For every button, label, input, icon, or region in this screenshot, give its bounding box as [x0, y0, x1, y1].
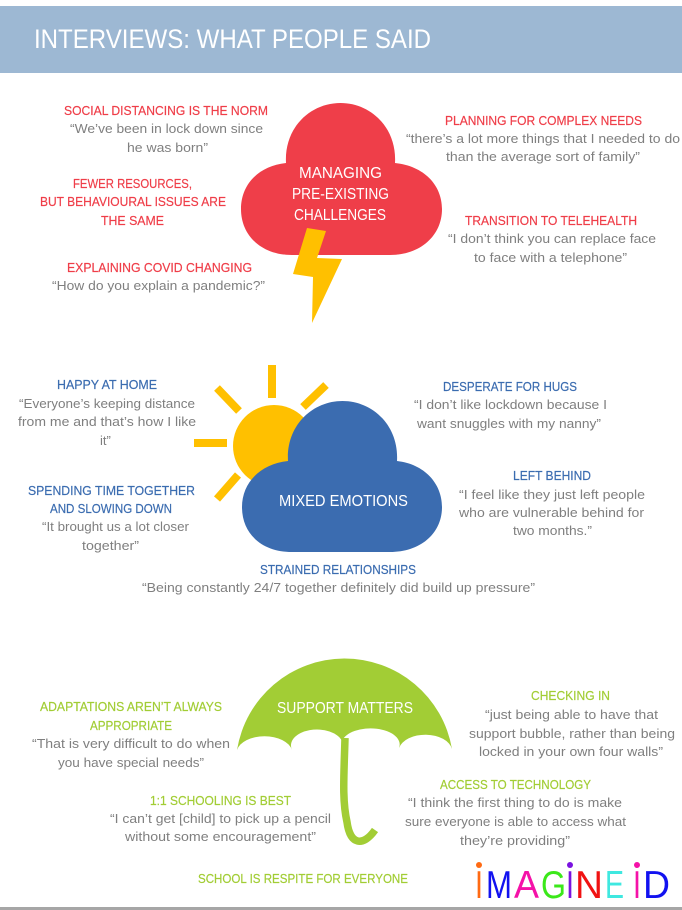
- quote: strained relationships: [142, 562, 535, 595]
- panel: managing pre-existing challenges: [40, 103, 680, 323]
- quote: access to technology: “I think the first thing to do is make: [408, 795, 622, 810]
- quote: adaptations: you have special needs”: [58, 755, 204, 770]
- quote: left behind: [458, 468, 645, 538]
- logo: Imagine ID: M: [486, 864, 512, 907]
- quote: left behind: “I feel like they just left people: [459, 487, 645, 502]
- quote: strained relationships: STRAINED RELATIONSHIPS: [260, 562, 416, 577]
- logo: Imagine ID: I: [475, 864, 483, 907]
- quote: checking in: support bubble, rather than being: [469, 726, 675, 741]
- quote: fewer resources: BUT BEHAVIOURAL ISSUES ARE: [40, 194, 226, 209]
- header banner: [0, 6, 682, 73]
- quote: explaining covid: “How do you explain a pandemic?”: [52, 278, 265, 293]
- logo: Imagine ID: [475, 862, 670, 907]
- icon: red storm cloud with label: MANAGING: [299, 165, 382, 182]
- quote: access to technology: ACCESS TO TECHNOLOGY: [440, 777, 591, 792]
- icon: sun with rays: [194, 365, 326, 499]
- quote: desperate for hugs: “I don’t like lockdown because I: [414, 397, 607, 412]
- quote: fewer resources: FEWER RESOURCES,: [73, 176, 192, 191]
- footer bar: [0, 907, 682, 910]
- quote: planning for complex needs: “there’s a lot more things that I needed to do: [406, 131, 680, 146]
- quote: fewer resources: [40, 176, 226, 228]
- quote: spending time together: “It brought us a lot closer: [42, 519, 190, 534]
- quote: spending time together: AND SLOWING DOWN: [50, 501, 172, 516]
- quote: checking in: [469, 688, 675, 759]
- panel: mixed emotions: [18, 365, 645, 595]
- quote: left behind: two months.”: [513, 523, 592, 538]
- icon: umbrella with label: SUPPORT MATTERS: [277, 700, 413, 717]
- quote: access to technology: they’re providing”: [460, 833, 570, 848]
- quote: adaptations: [32, 699, 230, 770]
- icon: blue cloud with label: MIXED EMOTIONS: [279, 493, 408, 510]
- quote: happy at home: from me and that’s how I like: [18, 414, 196, 429]
- quote: adaptations: APPROPRIATE: [90, 718, 172, 733]
- heading: school is respite: SCHOOL IS RESPITE FOR EVERYONE: [198, 871, 408, 886]
- logo: Imagine ID: G: [541, 864, 566, 907]
- quote: explaining covid: EXPLAINING COVID CHANGING: [67, 260, 252, 275]
- logo: Imagine ID: E: [605, 864, 624, 907]
- quote: happy at home: HAPPY AT HOME: [57, 377, 157, 392]
- icon: umbrella with label: [237, 659, 452, 841]
- quote: transition to telehealth: “I don’t think you can replace face: [448, 231, 656, 246]
- quote: checking in: locked in your own four walls”: [479, 744, 663, 759]
- quote: happy at home: [18, 377, 196, 448]
- header banner: INTERVIEWS: WHAT PEOPLE SAID: [34, 24, 431, 54]
- quote: social distancing: SOCIAL DISTANCING IS THE NORM: [64, 103, 268, 118]
- quote: access to technology: sure everyone is able to access what: [405, 814, 626, 829]
- logo: Imagine ID: D: [643, 864, 670, 907]
- logo: Imagine ID: A: [514, 864, 539, 907]
- quote: left behind: who are vulnerable behind for: [458, 505, 645, 520]
- quote: spending time together: SPENDING TIME TOGETHER: [28, 483, 195, 498]
- quote: desperate for hugs: DESPERATE FOR HUGS: [443, 379, 577, 394]
- quote: transition to telehealth: to face with a telephone”: [474, 250, 627, 265]
- quote: social distancing: he was born”: [127, 140, 208, 155]
- quote: 1:1 schooling: [110, 793, 331, 844]
- quote: desperate for hugs: want snuggles with my nanny”: [416, 416, 601, 431]
- quote: planning for complex needs: than the average sort of family”: [446, 149, 640, 164]
- quote: desperate for hugs: [414, 379, 607, 431]
- icon: lightning bolt: [293, 228, 342, 323]
- quote: planning for complex needs: PLANNING FOR COMPLEX NEEDS: [445, 113, 642, 128]
- icon: red storm cloud with label: CHALLENGES: [294, 207, 386, 224]
- quote: adaptations: “That is very difficult to do when: [32, 736, 230, 751]
- quote: strained relationships: “Being constantly 24/7 together definitely did build up pressure”: [142, 580, 535, 595]
- quote: happy at home: “Everyone’s keeping distance: [19, 396, 195, 411]
- quote: access to technology: [405, 777, 626, 848]
- panel: support matters: [32, 659, 675, 886]
- quote: planning for complex needs: [406, 113, 680, 164]
- quote: spending time together: together”: [82, 538, 139, 553]
- icon: blue cloud with label: [242, 401, 442, 552]
- quote: left behind: LEFT BEHIND: [513, 468, 591, 483]
- quote: transition to telehealth: TRANSITION TO TELEHEALTH: [465, 213, 637, 228]
- quote: checking in: “just being able to have that: [485, 707, 658, 722]
- quote: social distancing: [64, 103, 268, 155]
- quote: spending time together: [28, 483, 195, 553]
- quote: fewer resources: THE SAME: [101, 213, 164, 228]
- quote: checking in: CHECKING IN: [531, 688, 610, 703]
- quote: 1:1 schooling: “I can’t get [child] to pick up a pencil: [110, 811, 331, 826]
- quote: adaptations: ADAPTATIONS AREN’T ALWAYS: [40, 699, 222, 714]
- quote: social distancing: “We’ve been in lock down since: [70, 121, 263, 136]
- icon: red storm cloud with label: PRE-EXISTING: [292, 186, 389, 203]
- quote: happy at home: it”: [100, 433, 111, 448]
- quote: 1:1 schooling: 1:1 SCHOOLING IS BEST: [150, 793, 291, 808]
- icon: red storm cloud with label: [241, 103, 442, 255]
- quote: explaining covid: [52, 260, 265, 293]
- quote: 1:1 schooling: without some encouragement”: [124, 829, 316, 844]
- quote: transition to telehealth: [448, 213, 656, 265]
- logo: Imagine ID: I: [633, 864, 641, 907]
- logo: Imagine ID: N: [575, 864, 603, 907]
- logo: Imagine ID: I: [566, 864, 574, 907]
